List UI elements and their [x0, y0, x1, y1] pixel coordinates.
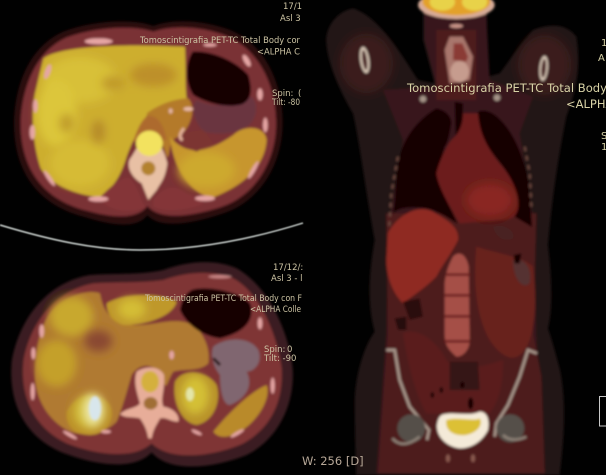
labels: upper axial scan: (: [298, 89, 301, 99]
labels: coronal scan: Tomoscintigrafia PET-TC Total Body: [406, 81, 606, 95]
CT table arc: [0, 223, 303, 250]
labels: upper axial scan: Tomoscintigrafia PET-TC Total Body cor: [139, 36, 300, 46]
labels: upper axial scan: Tilt: -80: [271, 98, 300, 108]
labels: upper axial scan: [139, 2, 302, 108]
labels: lower axial scan: Tomoscintigrafia PET-TC Total Body con F: [144, 294, 302, 304]
labels: lower axial scan: 17/12/:: [273, 263, 303, 273]
labels: upper axial scan: <ALPHA C: [257, 48, 300, 58]
window width label: W: 256 [D]: [302, 454, 364, 468]
labels: coronal scan: [406, 38, 606, 153]
side scale box: [600, 396, 606, 426]
labels: lower axial scan: Tilt: -90: [263, 354, 296, 364]
labels: lower axial scan: Spin:: [264, 345, 285, 355]
labels: lower axial scan: <ALPHA Colle: [250, 305, 301, 315]
labels: upper axial scan: Asl 3: [280, 14, 301, 24]
labels: coronal scan: A: [598, 53, 605, 64]
labels: lower axial scan: 0: [287, 345, 292, 355]
labels: upper axial scan: 17/1: [283, 2, 302, 12]
labels: upper axial scan: Spin:: [272, 89, 293, 99]
coronal whole-body scan: [326, 0, 578, 475]
axial scan: kidneys level: [11, 262, 293, 467]
labels: lower axial scan: [144, 263, 303, 364]
axial scan: upper abdomen: [14, 21, 283, 225]
labels: lower axial scan: Asl 3 - l: [271, 274, 303, 284]
